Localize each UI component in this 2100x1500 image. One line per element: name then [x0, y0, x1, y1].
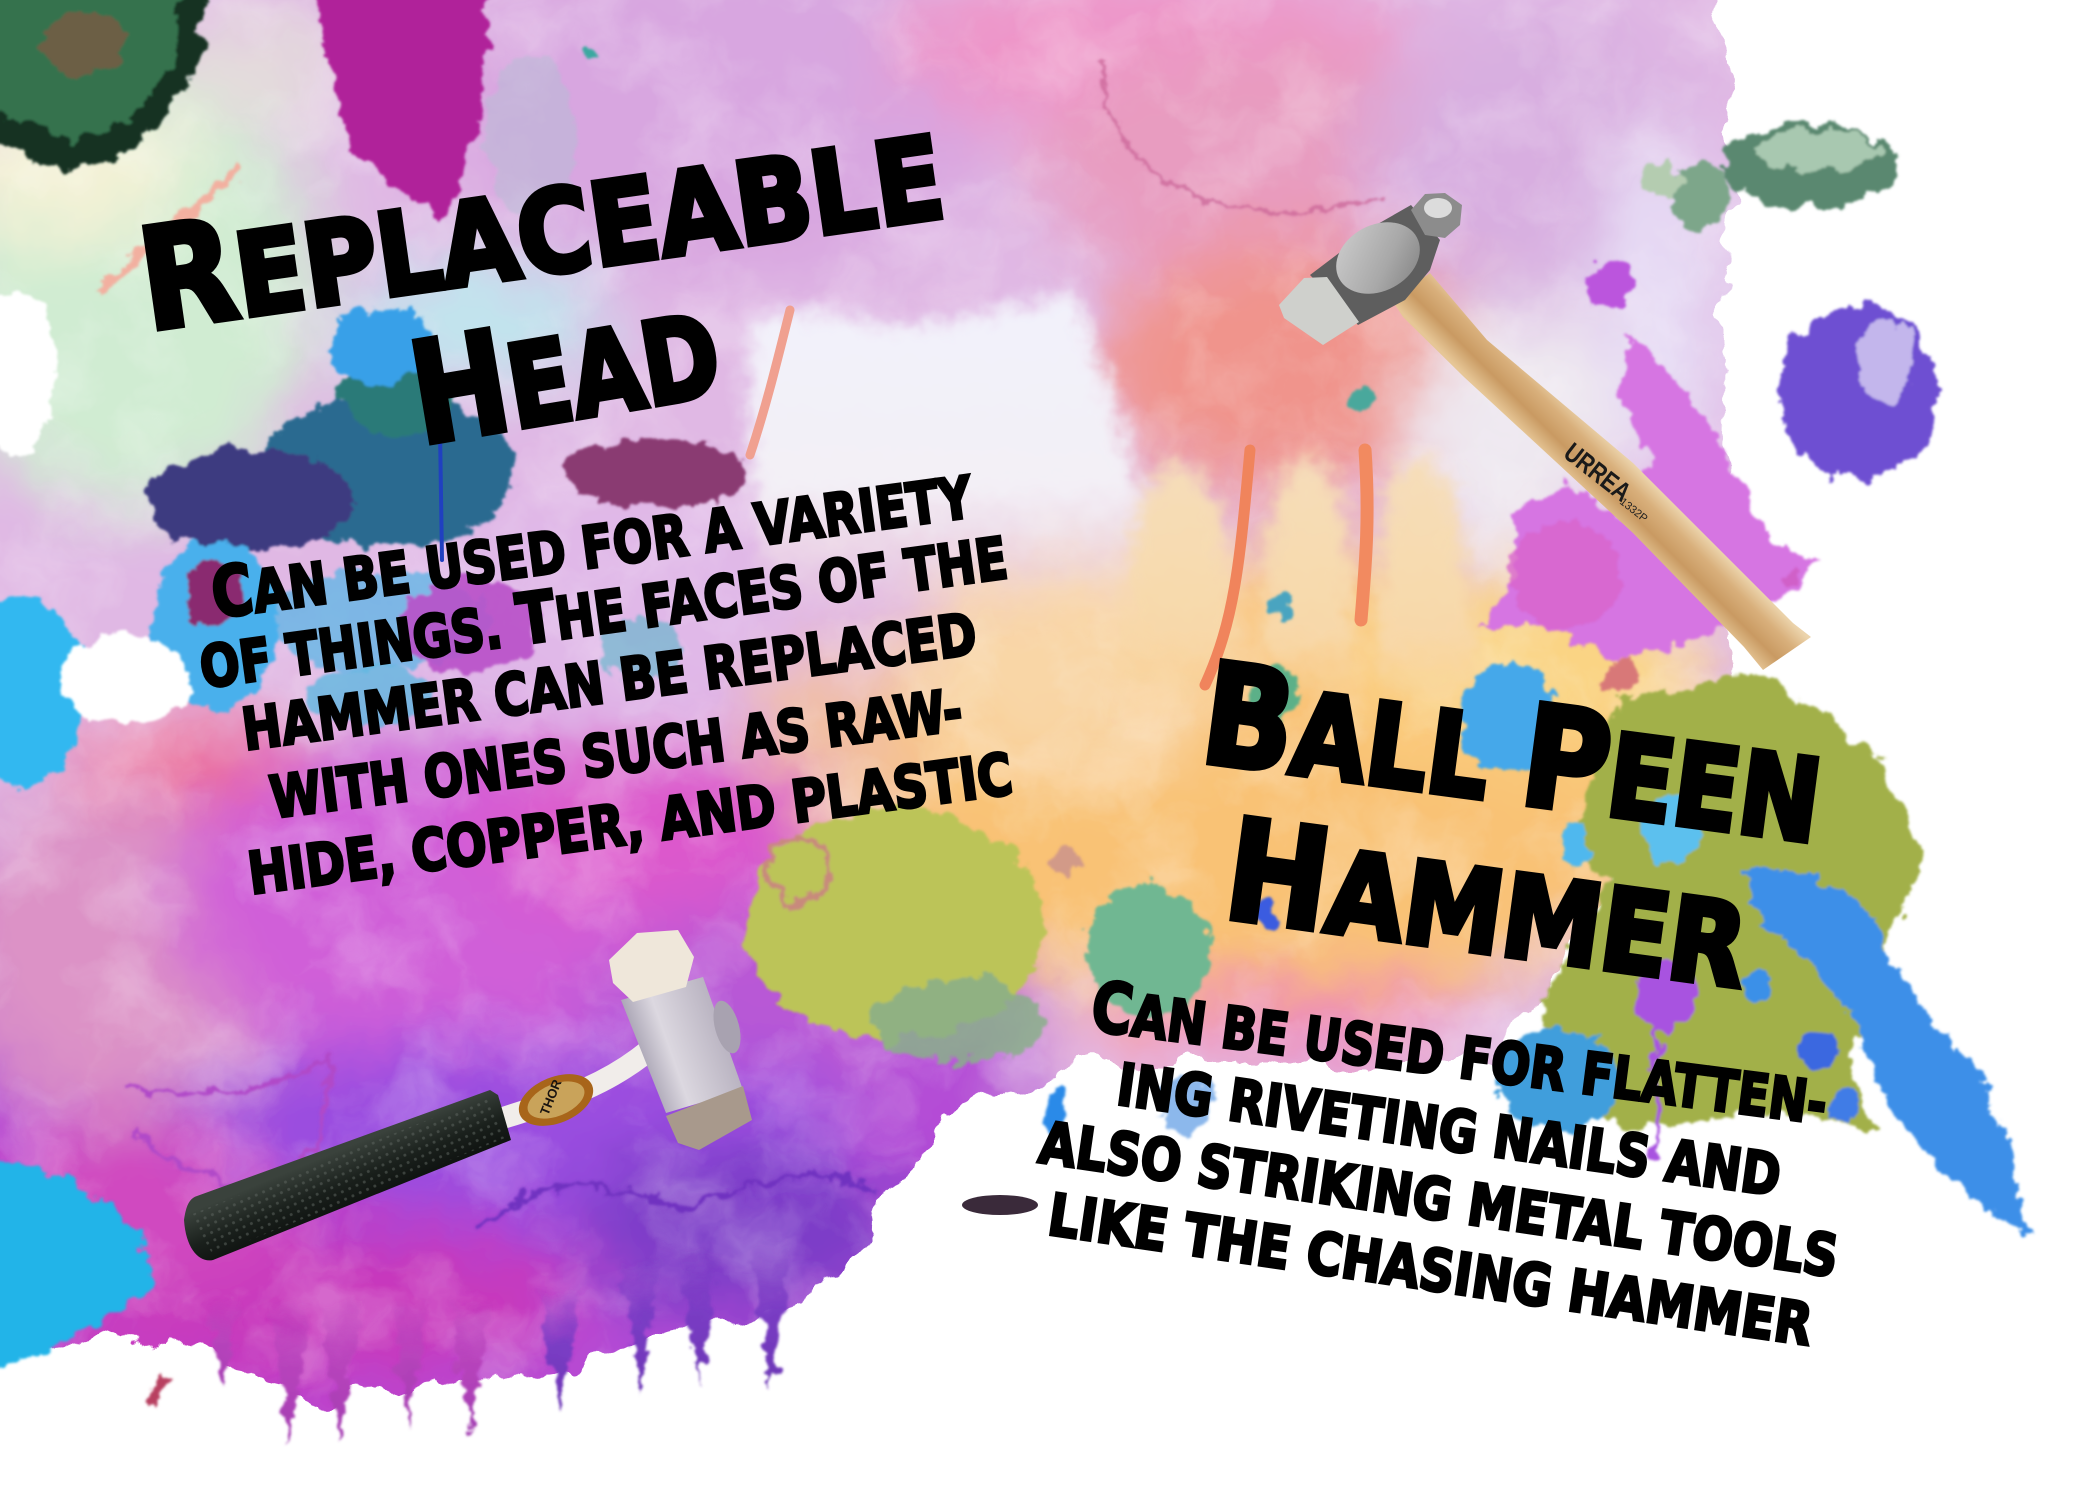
white paper gaps [0, 285, 190, 725]
shaft [503, 1045, 655, 1118]
upper soft cap [609, 930, 694, 1002]
text block: replaceable head description: HIDE, COPPER, AND PLASTIC [244, 740, 1016, 908]
peen highlight [1424, 198, 1452, 218]
grip knurling [190, 1095, 505, 1255]
hammer head neck [1310, 205, 1440, 325]
orange and salmon drips [440, 310, 1367, 685]
mallet body [621, 977, 743, 1113]
heading line 1: BALL PEEN [1194, 633, 1832, 876]
blue spots [1043, 663, 1859, 1138]
maroon splash [563, 439, 747, 507]
paint drips along the lower edge [146, 1240, 790, 1445]
teal circle [1086, 884, 1210, 1016]
rubber grip [184, 1090, 511, 1260]
heading line 1: REPLACEABLE [130, 88, 953, 364]
text block: ball peen hammer description: ING RIVETING NAILS AND [1113, 1051, 1785, 1210]
handle model number: 1332P [1617, 496, 1650, 525]
olive splash right [1540, 670, 1925, 1130]
small marks [582, 47, 1798, 902]
hammer flat face [1279, 277, 1359, 345]
text block: replaceable head description: HAMMER CAN BE REPLACED [238, 600, 980, 764]
pale splash and cream arches in the wash [748, 290, 1490, 720]
water rings [100, 60, 1380, 1230]
lower soft cap [666, 1086, 752, 1150]
hammer image: soft-face mallet [184, 930, 752, 1260]
hammer ball peen [1411, 193, 1462, 238]
text block: ball peen hammer description [1035, 966, 1842, 1359]
hammer crown [1324, 208, 1432, 308]
watercolor wash background [0, 0, 1742, 1412]
dark green blob [0, 0, 205, 170]
purple spot [1586, 261, 1634, 309]
text block: replaceable head description [194, 452, 1016, 908]
text block: ball peen hammer description: LIKE THE CHASING HAMMER [1044, 1181, 1817, 1359]
gold collar with label [511, 1064, 601, 1136]
text block: replaceable head description: WITH ONES SUCH AS RAW- [266, 676, 966, 832]
handle brand text: URREA [1558, 437, 1637, 508]
handle [1392, 273, 1811, 670]
green splash top right [1645, 123, 1898, 229]
olive blob center [745, 810, 1045, 1062]
text block: replaceable head description: CAN BE USED FOR A VARIETY [206, 452, 977, 635]
cyan edge left [0, 595, 150, 1385]
side knob [708, 998, 746, 1056]
hammer image: ball peen hammer [1279, 193, 1811, 670]
purple splash [1780, 304, 1936, 480]
heading: replaceable head [130, 88, 953, 478]
heading line 2: HEAD [400, 266, 730, 478]
heading line 2: HAMMER [1216, 789, 1758, 1021]
heading: ball peen hammer [1194, 633, 1832, 1021]
dark paint mark [962, 1195, 1038, 1215]
text block: ball peen hammer description: CAN BE USED FOR FLATTEN- [1087, 966, 1832, 1141]
text block: ball peen hammer description: ALSO STRIKING METAL TOOLS [1035, 1109, 1842, 1291]
pink splash [1480, 335, 1820, 660]
dark blue splash [145, 307, 680, 725]
text block: replaceable head description: OF THINGS. THE FACES OF THE [194, 513, 1012, 705]
blue streak [1745, 868, 2027, 1235]
purple drip [1635, 960, 1695, 1160]
magenta blob [305, 0, 490, 225]
gold collar with label: THOR [537, 1077, 565, 1117]
